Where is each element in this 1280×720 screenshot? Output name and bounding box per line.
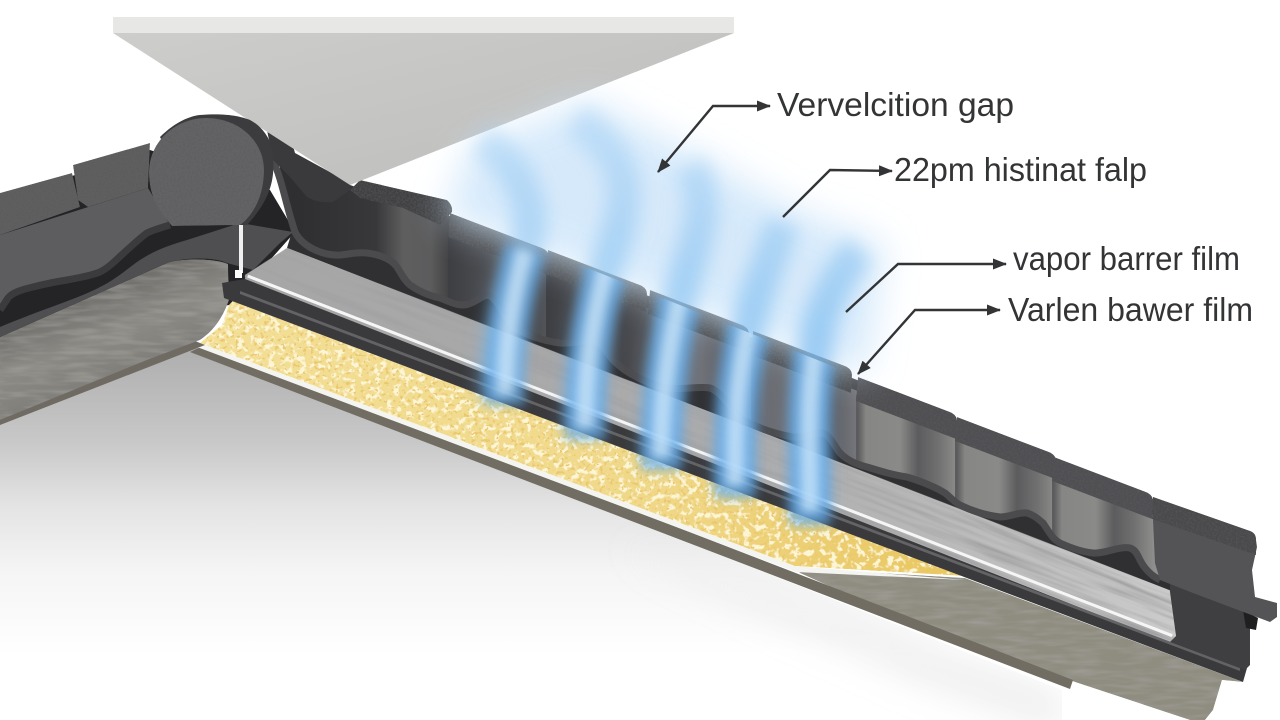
airflow streams bbox=[445, 100, 885, 525]
label: ventilation gap: Vervelcition gap bbox=[777, 86, 1014, 123]
left ridge beam bbox=[0, 259, 229, 420]
streams over the roof bbox=[505, 240, 820, 525]
second roll bbox=[73, 143, 150, 207]
tile rolls bbox=[448, 213, 1153, 519]
tile bodies bbox=[280, 165, 1164, 627]
insulation layer bbox=[197, 296, 965, 580]
concrete deck right bbox=[795, 568, 1243, 720]
metal highlight bbox=[247, 275, 1173, 637]
label: flap: 22pm histinat falp bbox=[894, 151, 1147, 188]
eave clip bbox=[1243, 610, 1258, 630]
end tile roll bbox=[1152, 497, 1256, 555]
ridge side tile bbox=[267, 125, 452, 225]
tile roof filler bbox=[445, 214, 1155, 530]
tile lower lip bbox=[273, 160, 1160, 580]
metal flashing sheet bbox=[242, 236, 1191, 644]
arrow: vapor barrier film bbox=[846, 264, 1006, 312]
ridge cap end disc bbox=[149, 114, 273, 226]
underlay band bbox=[287, 205, 1170, 592]
first roll bbox=[350, 180, 452, 225]
label: vapor barrier film bbox=[846, 240, 1240, 312]
arrow: second barrier film bbox=[858, 310, 1000, 374]
upper flap bbox=[267, 125, 350, 202]
soffit strip bbox=[190, 345, 1073, 689]
label: second barrier film bbox=[858, 291, 1253, 374]
arrow: ventilation gap bbox=[658, 106, 770, 172]
label: flap bbox=[783, 151, 1147, 217]
label: vapor barrier film: vapor barrer film bbox=[1013, 240, 1240, 277]
ridge fixing pin bbox=[235, 225, 243, 278]
upper roll bbox=[0, 173, 80, 235]
top ceiling panel bbox=[113, 17, 734, 185]
soft outer streams bbox=[480, 120, 860, 517]
lower dark plate at eave bbox=[1170, 575, 1258, 670]
left beam lower strip bbox=[0, 339, 205, 425]
label: second barrier film: Varlen bawer film bbox=[1008, 291, 1253, 328]
air haze bbox=[445, 100, 885, 375]
end tile with lip bbox=[1153, 497, 1277, 622]
label: ventilation gap bbox=[658, 86, 1014, 172]
ridge plate bbox=[0, 223, 293, 337]
roof tiles bbox=[273, 160, 1277, 627]
left side dark backing bbox=[0, 150, 295, 345]
arrow: flap bbox=[783, 170, 892, 217]
vapour film strip bbox=[222, 279, 1247, 682]
interior wall shading bbox=[0, 340, 1062, 720]
left roof tile bbox=[0, 143, 170, 310]
